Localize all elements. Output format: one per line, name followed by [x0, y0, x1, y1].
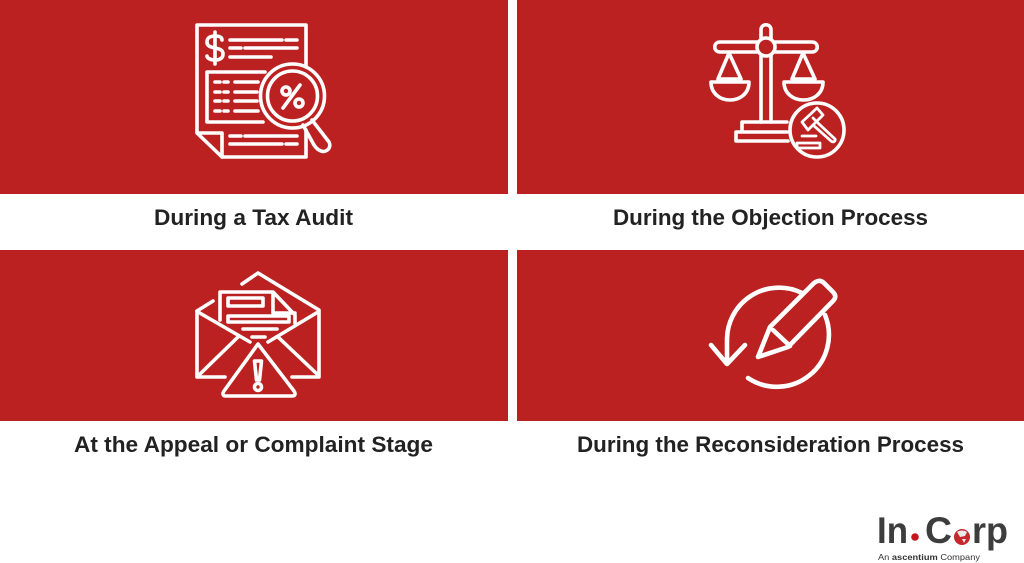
- heading: at the appeal or complaint stage: At the Appeal or Complaint Stage: [74, 432, 433, 457]
- logo: InCorp: C: [925, 510, 952, 551]
- icon: scales of justice with gavel: [711, 25, 844, 157]
- panel: tax audit: [0, 0, 508, 194]
- logo: InCorp: In: [877, 510, 908, 551]
- icon: tax document with magnifier: [197, 25, 330, 157]
- heading: during the objection process: During the Objection Process: [613, 205, 928, 230]
- logo: InCorp: An ascentium Company: [878, 552, 981, 562]
- logo: InCorp: rp: [972, 510, 1008, 551]
- logo: InCorp: [877, 510, 1008, 562]
- panel: reconsideration process: [517, 250, 1024, 421]
- icon: envelope with warning triangle: [197, 273, 319, 396]
- icon: pencil with circular arrow: [711, 281, 835, 387]
- panel: appeal or complaint stage: [0, 250, 508, 421]
- heading: during the reconsideration process: During the Reconsideration Process: [577, 432, 964, 457]
- heading: during a tax audit: During a Tax Audit: [154, 205, 354, 230]
- panel: objection process: [517, 0, 1024, 194]
